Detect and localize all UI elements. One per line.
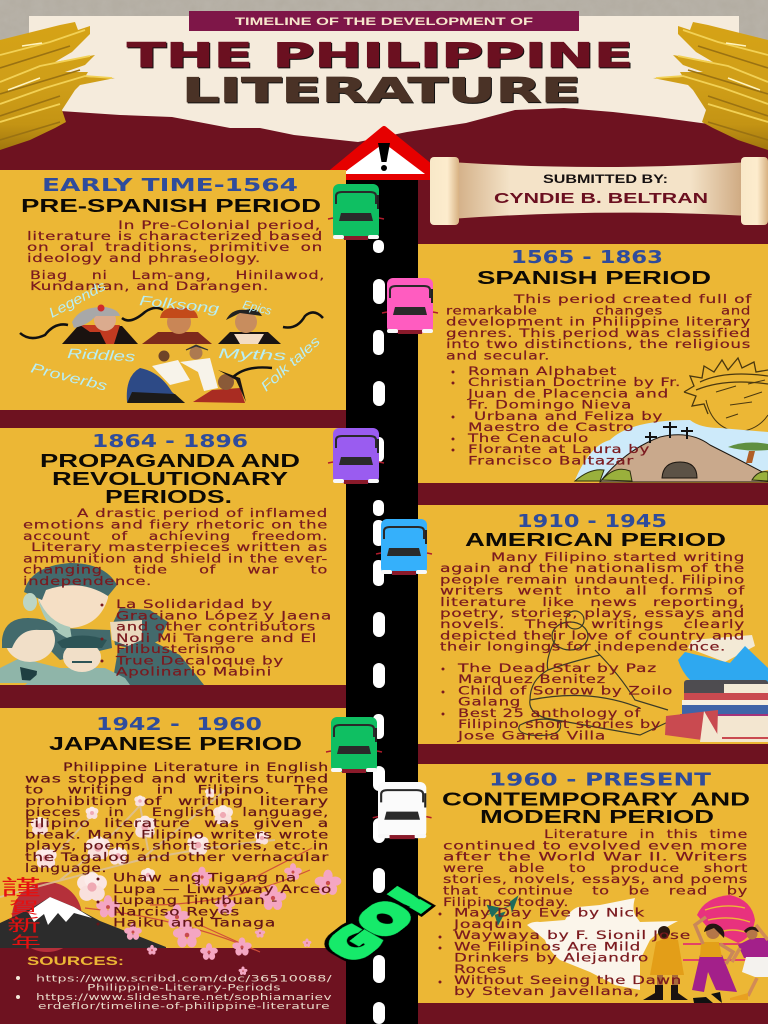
body text: prohibition of writing literary — [25, 795, 329, 808]
heading: american period: AMERICAN PERIOD — [465, 530, 726, 550]
body text: were able to produce short — [443, 862, 748, 875]
bullet list: Lupa — Liwayway Arceo — [113, 883, 332, 896]
illustration: stack of books and letter — [665, 635, 768, 742]
genre words: Legends — [46, 277, 108, 321]
body text: independence. — [23, 575, 152, 588]
body text: to writing in Filipino. The — [25, 784, 329, 796]
body text — [440, 551, 746, 654]
bullet list: Marquez Benitez — [458, 673, 606, 686]
body text: Kundaman, and Darangen. — [30, 280, 269, 293]
red calligraphy: 謹 — [1, 871, 41, 902]
body text — [446, 293, 753, 362]
car: blue — [376, 519, 432, 575]
panel: japanese period — [0, 708, 346, 975]
bullet list: Francisco Baltazar — [468, 454, 634, 468]
go sign: GO! — [316, 880, 442, 969]
heading: contemporary and modern period — [442, 790, 750, 827]
bullet list: Apolinario Mabini — [116, 666, 272, 678]
source links: Philippine-Literary-Periods — [87, 983, 281, 994]
car: white — [373, 782, 432, 839]
bullet list: Haiku and Tanaga — [113, 916, 276, 930]
panel: pre-spanish period — [0, 170, 346, 410]
red calligraphy: 新 — [7, 911, 41, 936]
heading: spanish period: SPANISH PERIOD — [477, 268, 711, 288]
body text: ammunition and shield in the ever- — [23, 552, 328, 566]
source links: https://www.scribd.com/doc/36510088/ — [36, 974, 333, 984]
bullet list: The Dead Star by Paz — [456, 662, 657, 675]
bullet list: We Filipinos Are Mild — [454, 940, 641, 954]
body text: changing tide of war to — [23, 564, 328, 576]
bullet list: Waywaya by F. Sionil Jose — [454, 929, 691, 942]
red calligraphy — [1, 871, 41, 951]
lower hero — [25, 635, 130, 685]
bullet list: Drinkers by Alejandro — [454, 952, 649, 964]
body text: writers went into all forms of — [440, 584, 746, 598]
genre words: Myths — [218, 345, 286, 363]
gold brush left — [0, 22, 115, 150]
car: purple — [328, 428, 384, 484]
bullet list — [97, 872, 332, 930]
bullet list: Roces — [454, 963, 507, 976]
body text: remarkable changes and — [446, 304, 751, 318]
heading: propaganda and revolutionary periods: REVOLUTIONARY — [52, 469, 288, 489]
title: THE PHILIPPINE — [127, 36, 633, 76]
date: 1864-1896: 1864 - 1896 — [92, 432, 248, 452]
body text: Filipinos today. — [443, 896, 569, 909]
submitted-by scroll — [430, 157, 768, 225]
subtitle banner: TIMELINE OF THE DEVELOPMENT OF — [235, 16, 533, 28]
panel: american period — [418, 505, 768, 744]
bullet list: Jose Garcia Villa — [457, 730, 606, 742]
gold brush right — [653, 22, 768, 150]
activist in yellow — [643, 926, 688, 1000]
bullet list: and other contributors — [116, 620, 316, 634]
warning sign — [326, 129, 443, 177]
bullet list: Florante at Laura by — [468, 443, 650, 456]
bullet list: Lupang Tinubuan - — [113, 894, 278, 907]
date: 1565-1863: 1565 - 1863 — [511, 248, 663, 268]
illustration: reading woman line art — [519, 611, 668, 735]
centre hero — [23, 563, 117, 660]
illustration: christ sketch and calvary hill — [575, 358, 768, 482]
heading: propaganda and revolutionary periods: PERIODS. — [105, 487, 232, 507]
heading: contemporary and modern period: CONTEMPORARY AND — [442, 790, 750, 810]
date: 1960-present: 1960 - PRESENT — [489, 770, 711, 790]
body text: Literature in this time — [544, 828, 748, 841]
bullet list: Filibusterismo — [116, 643, 236, 656]
bullet list — [442, 662, 673, 742]
submitted-by scroll: CYNDIE B. BELTRAN — [494, 190, 708, 207]
genre words — [29, 277, 323, 394]
source links: erdeflor/timeline-of-philippine-literature — [38, 1001, 330, 1012]
bullet list: Without Seeing the Dawn — [454, 974, 682, 987]
bullet list: Noli Mi Tangere and El — [116, 632, 317, 645]
body text: was stopped and writers turned — [25, 772, 329, 786]
body text: literature like news reporting, — [440, 596, 745, 609]
bullet list: Narciso Reyes — [113, 906, 240, 918]
bullet list: Galang — [458, 696, 521, 708]
bullet list: Filipino short stories by — [458, 718, 661, 731]
body text: and secular. — [446, 350, 550, 362]
dove — [527, 898, 678, 990]
car: green bottom — [326, 717, 382, 773]
body text: stories, novels, essays, and poems — [443, 873, 748, 886]
road — [346, 180, 418, 1024]
body text: the Tagalog and other vernacular — [25, 851, 329, 864]
genre words: Folk tales — [257, 333, 323, 394]
body text: Filipino literature was given a — [25, 817, 329, 830]
panel: propaganda and revolutionary periods — [0, 428, 346, 685]
body text: Many Filipino started writing — [491, 551, 745, 564]
body text — [443, 828, 748, 909]
pale blossoms — [31, 788, 269, 901]
body text: Biag ni Lam-ang, Hinilawod, — [30, 269, 325, 282]
body text: again and the nationalism of the — [440, 562, 745, 575]
road dashes — [373, 240, 385, 1024]
illustration: mount fuji and cherry blossoms — [0, 788, 341, 975]
body text: Literary masterpieces written as — [31, 541, 328, 554]
genre words: Folksong — [139, 292, 220, 316]
panel: spanish period — [418, 244, 768, 483]
body text: In Pre-Colonial period, — [118, 219, 321, 232]
body text: genres. This period was classified — [446, 327, 751, 340]
body text: Philippine Literature in English — [63, 761, 329, 774]
bullet list: True Decaloque by — [115, 654, 284, 668]
body text — [25, 761, 329, 875]
genre words: Proverbs — [29, 359, 109, 394]
body text: literature is characterized based — [27, 230, 323, 243]
bullet list: Christian Doctrine by Fr. — [468, 376, 681, 389]
illustration: filipino heroes — [0, 563, 204, 685]
body text: poetry, stories, plays, essays and — [440, 607, 745, 620]
sources — [16, 954, 333, 1012]
bullet list: Uhaw ang Tigang na — [113, 872, 297, 884]
activist boy — [730, 925, 768, 1000]
pink fist — [697, 895, 755, 943]
body text: pieces in English language, — [25, 806, 329, 819]
bullet list: Roman Alphabet — [468, 365, 617, 378]
sources heading: SOURCES: — [27, 954, 124, 968]
body text: account of achieving freedom. — [23, 530, 328, 543]
body text: break. Many Filipino writers wrote — [25, 828, 329, 842]
genre words: Riddles — [67, 345, 136, 365]
subtitle banner — [189, 11, 579, 31]
date: 1942-1960: 1942 - 1960 — [96, 715, 262, 735]
body text — [27, 219, 325, 293]
car: pink — [382, 278, 438, 334]
red calligraphy: 年 — [11, 929, 41, 951]
left hero — [0, 618, 62, 683]
body text: emotions and fiery rhetoric on the — [23, 518, 328, 532]
bullet list: Urbana and Feliza by — [474, 410, 663, 423]
date: early time-1564: EARLY TIME-1564 — [42, 176, 298, 196]
body text: people remain undaunted. Filipino — [440, 574, 745, 586]
body text: A drastic period of inflamed — [77, 507, 328, 520]
olive sprig — [484, 896, 518, 925]
bullet list: The Cenaculo — [467, 432, 589, 445]
bullet list: Fr. Domingo Nieva — [468, 398, 632, 412]
heading: propaganda and revolutionary periods: PROPAGANDA AND — [40, 451, 300, 471]
body text: development in Philippine literary — [446, 316, 751, 328]
body text: on oral traditions, primitive on — [27, 241, 323, 254]
cream header paper — [29, 16, 739, 146]
heading: japanese period: JAPANESE PERIOD — [49, 734, 302, 754]
illustration: dove, fist and activists — [484, 895, 768, 1003]
body text: their longings for independence. — [440, 640, 726, 654]
body text: plays, poems, short stories, etc. in — [25, 840, 329, 852]
bullet list — [439, 907, 691, 998]
title — [127, 36, 633, 111]
body text: depicted their love of country and — [440, 630, 745, 642]
source links: https://www.slideshare.net/sophiamariev — [36, 992, 332, 1003]
pink blossoms — [96, 863, 341, 975]
red calligraphy: 賀 — [9, 894, 39, 918]
source links — [16, 974, 333, 1012]
body text: This period created full of — [512, 293, 753, 306]
bullet list: La Solidaridad by — [116, 598, 273, 611]
panel: contemporary and modern period — [418, 764, 768, 1003]
submitted-by scroll: SUBMITTED BY: — [543, 174, 668, 186]
body text: novels. Their writings clearly — [440, 618, 745, 631]
right hero — [110, 608, 204, 685]
heading: pre-spanish period: PRE-SPANISH PERIOD — [21, 196, 321, 216]
heading: propaganda and revolutionary periods — [40, 451, 300, 507]
bullet list — [101, 598, 332, 678]
bullet list: Juan de Placencia and — [467, 388, 669, 400]
body text: continued to evolved even more — [443, 840, 748, 852]
body text: after the World War II. Writers — [443, 851, 748, 864]
body text: ideology and phraseology. — [27, 252, 261, 265]
bullet list: Graciano López y Jaena — [116, 610, 332, 622]
genre words: Epics — [241, 297, 273, 318]
bullet list: Child of Sorrow by Zoilo — [458, 684, 673, 698]
bullet list: May Day Eve by Nick — [454, 907, 645, 920]
car: green top — [328, 184, 384, 240]
stone background — [0, 0, 768, 180]
body text — [23, 507, 328, 588]
date: 1910-1945: 1910 - 1945 — [517, 512, 667, 532]
bullet list: Best 25 anthology of — [458, 707, 642, 720]
body text: into two distinctions, the religious — [446, 338, 751, 351]
heading: contemporary and modern period: MODERN PERIOD — [480, 807, 714, 827]
activist in purple — [692, 917, 737, 1003]
body text: language. — [25, 862, 107, 875]
bullet list: Joaquin — [452, 918, 523, 931]
illustration: indigenous people and oral genres — [20, 277, 323, 403]
bullet list: Maestro de Castro — [468, 421, 634, 434]
bullet list: by Stevan Javellana, — [454, 985, 640, 998]
bullet list — [452, 365, 681, 468]
body text: that continue to be read by — [443, 884, 748, 898]
title: LITERATURE — [182, 71, 581, 111]
